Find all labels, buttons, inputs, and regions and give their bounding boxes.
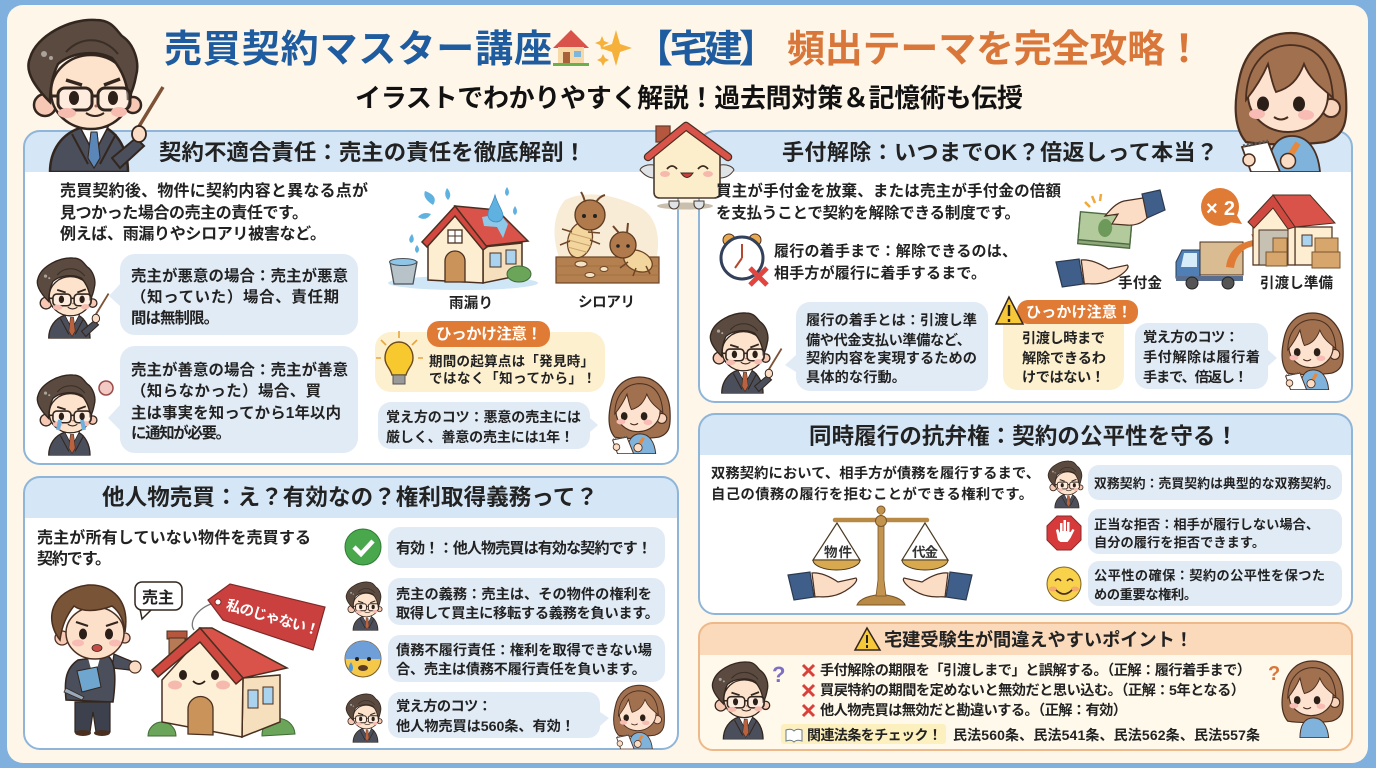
mistake list: 他人物売買は無効だと勘違いする。（正解：有効） [820,702,1127,719]
law reference articles: 民法560条、民法541条、民法562条、民法557条 [953,727,1260,743]
illustration: smiling house [148,628,295,737]
panel header band [24,477,678,518]
illustration: truck and house [1176,195,1340,289]
speech bubble: bad faith: 間は無制限。 [131,309,219,327]
panel header band [24,131,678,172]
speech bubble: memory tip: 手まで、倍返し！ [1143,369,1248,386]
label: 手付金: 手付金 [1118,274,1162,292]
illustration: balance scale [788,506,972,605]
speech bubble: memory tip: 厳しく、善意の売主には1年！ [386,429,574,445]
icon: smile [1047,567,1081,601]
icon: sweat face [345,641,381,677]
item: refusal: 自分の履行を拒否できます。 [1094,534,1265,550]
panel outline [699,131,1352,402]
text: until commencement: 相手方が履行に着手するまで。 [774,264,986,282]
subtitle: イラストでわかりやすく解説！過去問対策＆記憶術も伝授 [355,83,1023,113]
text: until commencement: 履行の着手まで：解除できるのは、 [774,242,1017,260]
item: seller duty [388,578,665,625]
speech bubble: definition: 具体的な行動。 [806,369,906,386]
avatar: teacher pointing [37,258,109,339]
avatar: student [1282,313,1343,390]
panel header band [699,623,1352,655]
law reference label: 関連法条をチェック！ [807,727,942,743]
illustration: seller figure [52,585,141,736]
intro text: 売主が所有していない物件を売買する [37,528,311,547]
speech bubble: memory tip: 覚え方のコツ：悪意の売主には [386,409,581,425]
speech bubble: definition [785,302,988,391]
callout: trap warning [375,321,605,392]
callout: trap warning: 期間の起算点は「発見時」 [429,353,594,369]
item: default liability: 債務不履行責任：権利を取得できない場 [396,642,652,659]
heading: 契約不適合責任：売主の責任を徹底解剖！ [159,140,586,165]
speech bubble: good faith: 主は事実を知ってから1年以内 [131,403,341,422]
avatar: teacher [1048,461,1083,508]
speech bubble: bad faith: （知っていた）場合、責任期 [131,287,339,306]
callout: trap warning: ひっかけ注意！ [436,325,542,343]
heading: 宅建受験生が間違えやすいポイント！ [884,629,1193,650]
item: default liability: 合、売主は債務不履行責任を負います。 [396,661,646,678]
title: 頻出テーマを完全攻略！ [787,29,1203,71]
panel body [699,131,1352,402]
item: valid [388,527,665,568]
icon: alarm clock with cross [721,234,767,285]
icon: check [345,529,381,565]
speech bubble: 売主 [135,582,182,619]
intro text: 契約です。 [37,549,111,568]
speech bubble: memory tip: 覚え方のコツ： [1143,329,1239,346]
speech bubble: bad faith: 売主が悪意の場合：売主が悪意 [131,266,348,285]
avatar: teacher thinking [712,662,770,740]
illustration: leaking roof house [388,187,538,290]
avatar: student [609,377,670,454]
speech bubble: memory tip [1135,323,1277,389]
speech bubble: memory tip [378,402,598,449]
item: fairness: めの重要な権利。 [1094,586,1197,602]
badge: ×2: ×2 [1206,198,1235,220]
speech bubble: definition: 備や代金支払い準備など、 [806,332,971,349]
callout: trap warning: 引渡し時まで [1022,330,1105,347]
intro text: 双務契約において、相手方が債務を履行するまで、 [711,464,1040,482]
panel outline [699,623,1352,750]
item: seller duty: 取得して買主に移転する義務を負います。 [396,605,659,622]
speech bubble: good faith [108,346,358,453]
mistake list: 買戻特約の期間を定めないと無効だと思い込む。（正解：5年となる） [820,682,1245,699]
panel body [699,414,1352,614]
panel body [699,623,1352,750]
item: fairness: 公平性の確保：契約の公平性を保つた [1094,567,1325,583]
avatar: teacher worried [37,375,113,456]
item: memory tip [388,692,609,738]
avatar: student thinking [1282,661,1343,738]
intro text: 売買契約後、物件に契約内容と異なる点が [60,181,368,200]
speech bubble: 売主: 売主 [142,588,174,607]
badge: ×2 [1201,188,1242,226]
panel header band [699,414,1352,455]
panel: 契約不適合責任 [24,131,678,464]
illustration: termites [555,192,659,283]
callout: trap warning: ではなく「知ってから」！ [429,371,596,386]
avatar: teacher [346,582,382,631]
item: default liability [388,635,665,682]
law reference label [781,724,946,744]
character: student with notebook [1236,33,1346,172]
intro text: 手付解除 [716,181,1061,222]
callout: trap warning: ひっかけ注意！ [1026,303,1132,321]
icon: question mark: ? [1268,663,1280,685]
illustration: money and hands [1056,190,1165,287]
tag: 私のじゃない [192,584,325,650]
item: bilateral contract [1088,465,1342,500]
mistake list: 手付解除の期限を「引渡しまで」と誤解する。（正解：履行着手まで） [820,662,1251,679]
speech bubble: good faith: に通知が必要。 [131,423,231,442]
item: refusal [1088,509,1342,554]
avatar: teacher [346,694,382,743]
icon: sparkles [595,30,632,66]
item: fairness [1088,561,1342,606]
icon: stop hand [1047,516,1081,550]
intro text: 手付解除: を支払うことで契約を解除できる制度です。 [716,203,1020,222]
panel body [24,477,678,749]
item: seller duty: 売主の義務：売主は、その物件の権利を [396,586,652,603]
title: 売買契約マスター講座 [164,29,552,71]
mistake list [803,662,1251,719]
speech bubble: definition: 履行の着手とは：引渡し準 [806,312,977,329]
item: valid: 有効！：他人物売買は有効な契約です！ [396,539,652,557]
heading: 同時履行の抗弁権：契約の公平性を守る！ [809,424,1238,449]
item: bilateral contract: 双務契約：売買契約は典型的な双務契約。 [1094,476,1339,491]
item: memory tip: 他人物売買は560条、有効！ [396,718,575,735]
title [164,29,1203,71]
intro text [711,464,1040,503]
intro text: 手付解除: 買主が手付金を放棄、または売主が手付金の倍額 [716,181,1061,200]
panel header band [699,131,1352,172]
item: refusal: 正当な拒否：相手が履行しない場合、 [1094,516,1319,532]
label: 雨漏り: 雨漏り [449,295,493,312]
intro text [37,528,311,568]
heading: 手付解除：いつまでOK？倍返しって本当？ [782,140,1218,165]
panel: 同時履行の抗弁権 [699,414,1352,614]
panel body [24,131,678,464]
panel: よくある間違い [699,623,1352,750]
illustration: balance scale: 代金 [912,544,938,560]
label: シロアリ: シロアリ [578,295,635,311]
intro text: 自己の債務の履行を拒むことができる権利です。 [711,485,1033,503]
avatar: student [614,685,664,749]
intro text: 見つかった場合の売主の責任です。 [60,203,308,222]
icon: question mark: ? [772,662,785,687]
callout: trap warning: 解除できるわ [1022,350,1106,367]
text: until commencement [774,242,1017,282]
speech bubble: definition: 契約内容を実現するための [806,350,977,367]
panel outline [24,131,678,464]
label: 引渡し準備: 引渡し準備 [1260,274,1334,292]
callout: trap warning [996,297,1138,390]
speech bubble: memory tip: 手付解除は履行着 [1143,349,1260,366]
intro text [60,181,368,243]
speech bubble: good faith: 売主が善意の場合：売主が善意 [131,360,348,379]
panel: 手付解除 [699,131,1352,402]
illustration: balance scale: 物件 [824,544,852,560]
icon: warning triangle [855,628,880,650]
item: memory tip: 覚え方のコツ： [396,698,492,715]
panel: 他人物売買 [24,477,678,749]
speech bubble: good faith: （知らなかった）場合、買 [131,381,321,400]
tag: 私のじゃない: 私のじゃない！ [224,597,321,639]
heading: 他人物売買：え？有効なの？権利取得義務って？ [102,485,598,510]
intro text: 例えば、雨漏りやシロアリ被害など。 [60,224,326,243]
callout: trap warning: けではない！ [1022,370,1105,386]
speech bubble: bad faith [109,254,358,335]
panel outline [699,414,1352,614]
avatar: teacher pointing [710,313,782,394]
mascot: house [640,126,734,210]
icon: house emoji [553,30,589,66]
panel outline [24,477,678,749]
character: teacher with pointer [28,20,163,172]
icon: light bulb [376,331,423,384]
title: 【宅建】 [635,29,777,71]
